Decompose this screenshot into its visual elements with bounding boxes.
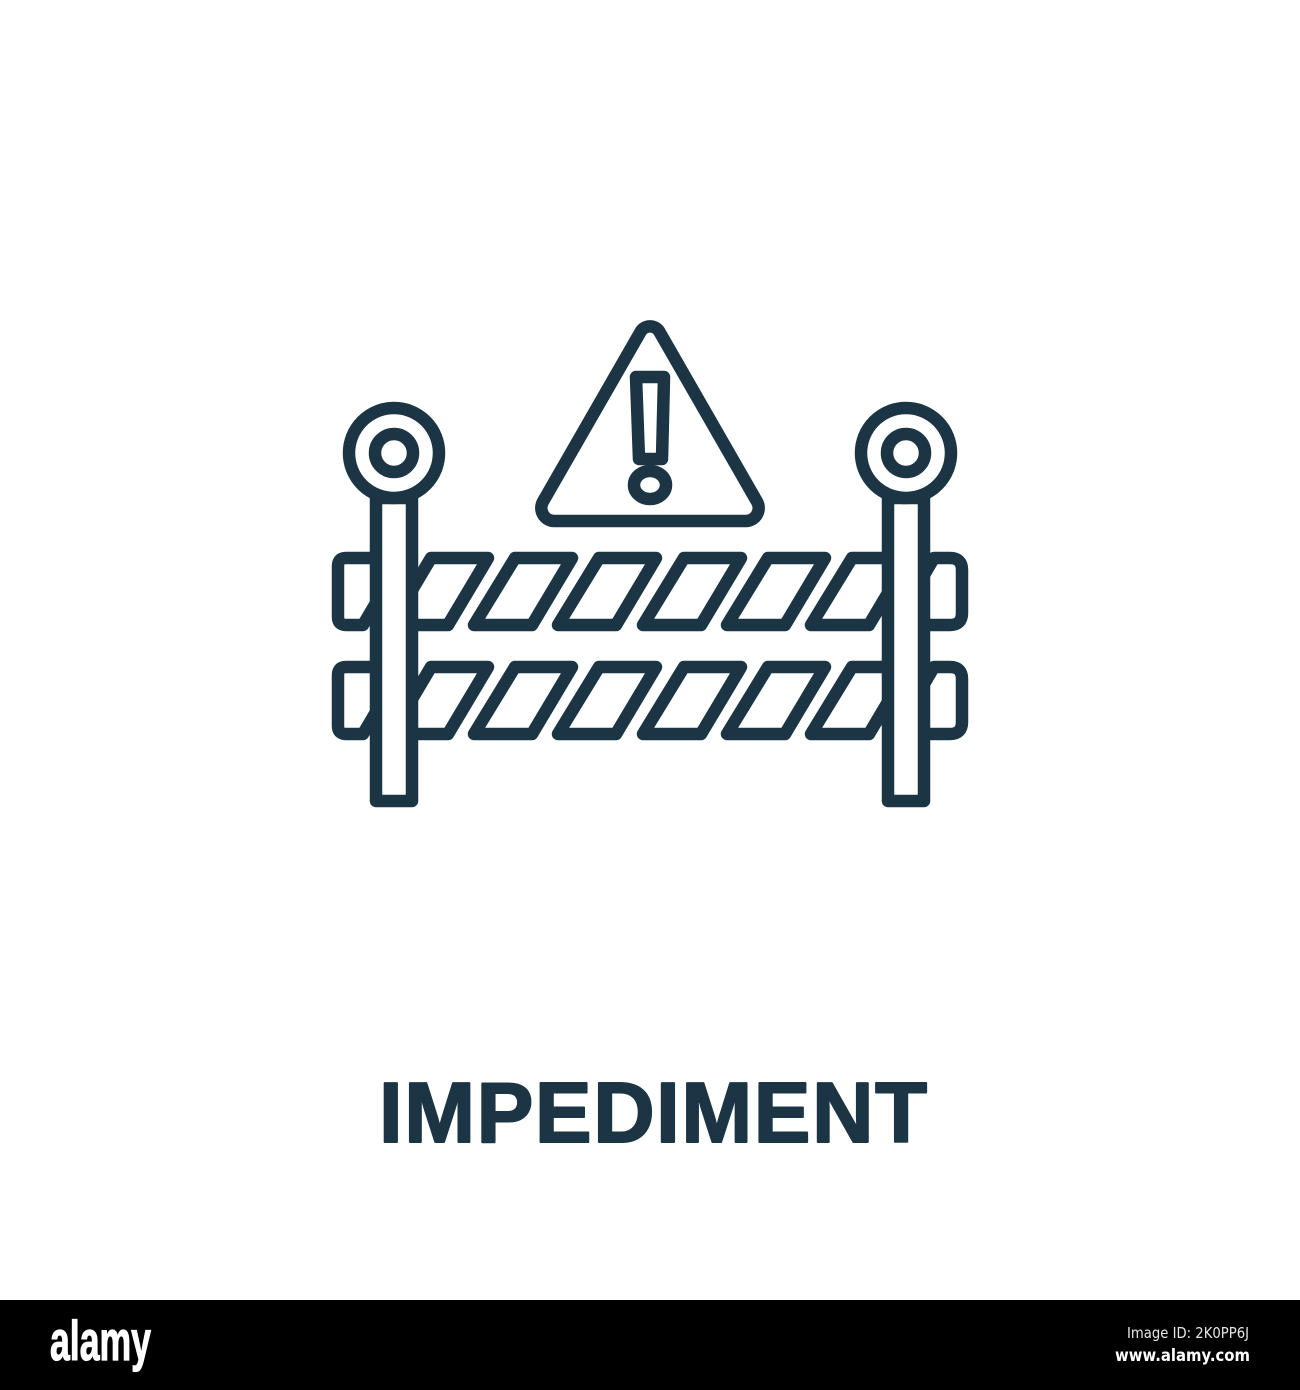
- left post with lamp: [349, 408, 439, 801]
- title: IMPEDIMENT: IMPEDIMENT: [379, 1066, 927, 1161]
- footer bar: [0, 1300, 1300, 1390]
- upper barrier rail: [338, 558, 962, 625]
- lower barrier rail: [338, 667, 962, 734]
- footer logo: alamy: alamy: [50, 1309, 151, 1372]
- footer image id: Image ID: 2K0PP6J: [1127, 1324, 1249, 1342]
- right post with lamp: [861, 408, 951, 801]
- icon: warning triangle: [541, 326, 759, 521]
- footer url: www.alamy.com: [1115, 1346, 1250, 1366]
- icon: road barrier with warning sign: [338, 326, 962, 801]
